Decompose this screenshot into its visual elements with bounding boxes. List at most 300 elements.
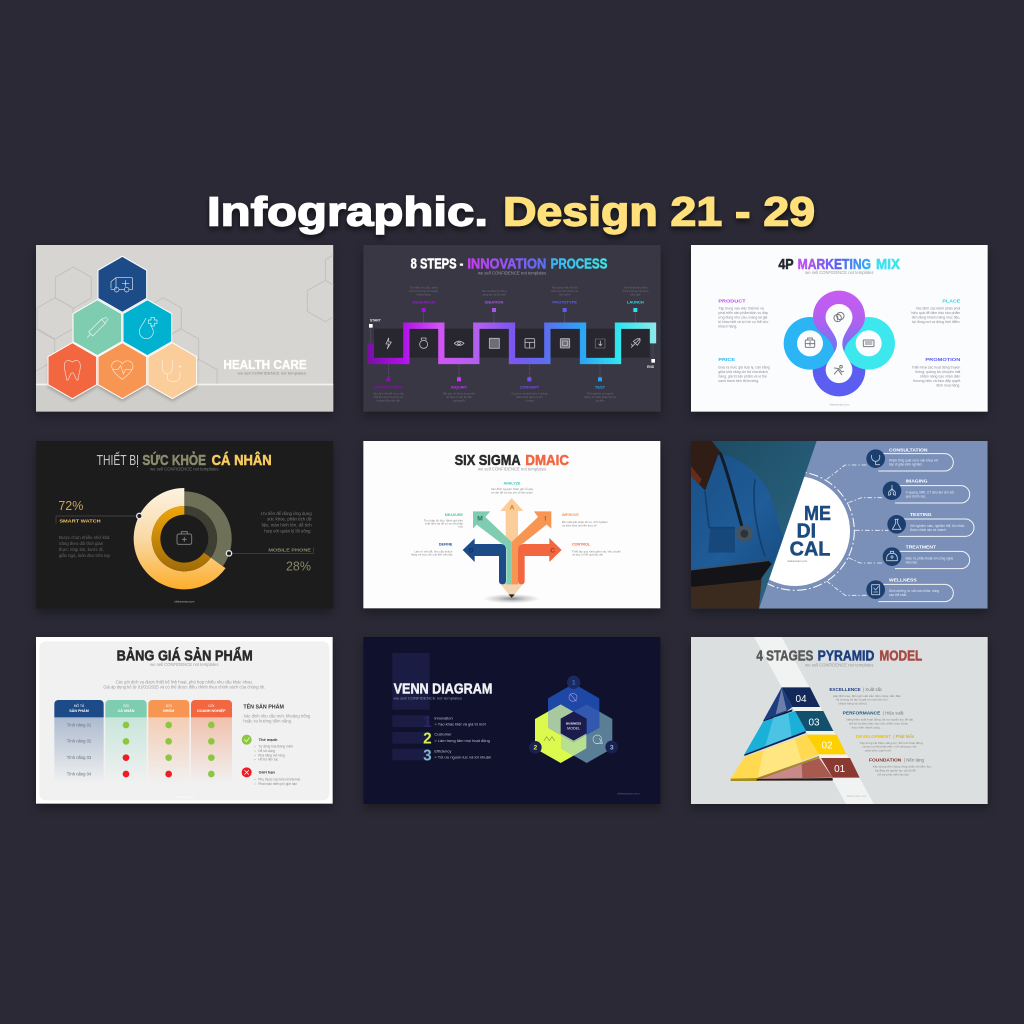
item: consultation: bác sĩ giàu kinh nghiệm. [889,463,923,467]
item: treatment: hiện đại. [906,560,918,564]
heading: 4 stages pyramid model: 4 STAGES [756,649,814,665]
callout: mobile phone: hợp với quản lý lối sống. [264,528,312,533]
callout: mobile phone: Ưu tiên để dùng ứng dụng [261,511,312,516]
item: customer [423,731,490,748]
ring: place [842,317,895,370]
text: product: trị khác biệt và lợi ích cụ thể cho [718,320,768,324]
arrow: define [463,538,506,584]
text: excellence: EXCELLENCE [829,687,861,692]
text: price: Đưa ra mức giá hợp lý, cân bằng [718,365,770,370]
text: measure [424,513,464,529]
text: limitations: Phụ thuộc vào kết nối Internet [258,777,300,781]
item: testing: TESTING [910,512,932,518]
step 6 label: kiểm tra tính khả thi và [551,289,579,293]
text: development: Tập trung cải thiện năng lực, đổi mới hoạt động, [860,741,924,745]
heading: medical: ME [804,502,831,525]
donut segment: mobile phone [184,491,232,566]
text: development: phát triển mạnh mẽ. [865,749,892,753]
arrow letters: I [544,516,546,523]
step 4 label [482,289,507,312]
step 4 label: IDEATION [485,300,503,305]
text: limitations: Phần bản miễn phí giới hạn [258,781,297,786]
heading: six sigma dmaic: DMAIC [525,453,569,469]
text: control [572,543,621,557]
panel: venn diagram [363,637,660,804]
panel: product pricing table [36,637,333,804]
text: control: CONTROL [572,543,591,547]
column bodies [54,717,232,784]
callout: smart watch: SMART WATCH [59,518,101,524]
text: product: phát triển sản phẩm/dịch vụ đáp [718,311,768,315]
column header: product description: MÔ TẢ [74,703,85,708]
step 7 label [584,377,616,402]
step 8 label: hiệu quả [630,292,641,296]
panel: personal health devices donut [36,441,333,609]
item: innovation [423,714,486,731]
heading: 8 steps: 8 STEPS - [411,256,463,272]
text: price: PRICE [718,357,735,362]
heading: six sigma dmaic: SIX SIGMA [455,453,521,469]
text: excellence: | Xuất sắc [863,687,883,692]
text: improve [562,513,609,527]
text: place: tại đúng nơi và đúng thời điểm. [912,320,960,324]
text: development: | Phát triển [893,734,915,739]
text: place: PLACE [942,298,960,303]
hexagon: customer [535,704,586,763]
item: wellness: WELLNESS [889,577,917,583]
text: analyze [491,482,534,494]
heading: venn diagram: VENN DIAGRAM [394,682,492,698]
column header: enterprise: DOANH NGHIỆP [197,708,226,713]
row labels: Tính năng 04 [67,771,92,776]
number badge 3: 3 [610,744,614,751]
intro text: Các gói dịch vụ được thiết kế linh hoạt, phù hợp nhiều nhu cầu khác nhau. [116,679,253,684]
arrow letters [469,505,555,555]
step 6 label [551,285,579,312]
text: excellence: thị trường và tạo ra giá trị vượt trội cho [836,698,888,702]
text: place: đến đúng khách hàng mục tiêu, [912,315,960,319]
text: excellence: Đạt đỉnh cao, đội ngũ xuất sắc, tiềm năng, dẫn đầu [833,693,901,698]
text: strengths: Thế mạnh [259,737,278,742]
text: improve: Đề xuất giải pháp tối ưu, thử nghiệm [562,520,609,524]
footer brand: slidescream.com [617,792,640,796]
text: analyze: ra vấn đề và các yếu tố liên quan [491,490,533,494]
hexagon: ambulance [98,256,147,312]
text: place: Xác định các kênh phân phối [916,306,961,310]
item: testing: Xét nghiệm máu, nghiệm thể, tìm nhân [910,524,965,528]
overlap: innovation and customer [548,704,586,742]
step 4 label: sáng tạo và đột phá [482,292,506,296]
text: product: PRODUCT [718,298,746,303]
heading: six sigma dmaic [455,453,569,469]
centre hexagon: business model: MODEL [567,727,580,731]
item: treatment: TREATMENT [906,545,936,551]
text: performance: chỉ số và đảm bảo mục tiêu chiến lược được [849,721,909,725]
subtitle: we sell CONFIDENCE not templates [805,662,873,667]
text: analyze: ANALYZE [504,482,521,486]
number badge 1: 1 [572,680,576,687]
item: treatment [883,545,970,569]
heading: bảng giá sản phẩm: BẢNG GIÁ SẢN PHẨM [117,646,253,664]
step 6 label: Xây dựng mẫu thử để [552,285,578,290]
row labels: Tính năng 02 [67,739,92,744]
item: efficiency [423,747,491,764]
text: promotion: nhằm nâng cao nhận diện [920,373,960,378]
end marker: END [647,365,655,369]
heading: thiết bị sức khỏe cá nhân: CÁ NHÂN [212,451,272,469]
panel: six sigma DMAIC [363,441,660,608]
pencil arrows diagram [463,498,562,603]
text: performance: Nâng hiệu suất hoạt động, tối ưu nguồn lực để đạt [846,717,913,721]
arrow: measure [473,511,512,584]
callout: smart watch: giấc ngủ, luôn đeo trên tay [59,553,111,558]
callout: mobile phone: MOBILE PHONE [268,547,312,553]
hexagon: blood drop [123,300,172,356]
text: promotion: thương hiệu và thúc đẩy quyết [913,379,960,383]
step 1 label: OPPORTUNITY [374,385,403,390]
heading: 4P marketing mix: 4P [778,257,794,273]
step 8 label: LAUNCH [627,300,644,305]
footer brand: slidescream.com [174,795,195,799]
step 1 label: hướng đến nhu cầu [377,398,401,402]
heading: thiết bị sức khỏe cá nhân: THIẾT BỊ [97,452,139,469]
text: product: ứng đúng nhu cầu, mang lại giá [718,315,767,319]
centre hexagon: business model [561,711,587,741]
item: imaging: IMAGING [906,479,928,485]
column header: personal: CÁ NHÂN [118,708,135,713]
dashed connectors [827,465,888,595]
text: improve: và triển khai cải tiến thực tế [562,523,597,527]
text: foundation: | Nền tảng [904,757,924,762]
step 3 label: để hiểu rõ vấn đề cần [446,395,472,399]
row labels: Tính năng 01 [67,723,92,728]
text: promotion: PROMOTION [925,357,961,362]
text: control: Thiết lập quy trình giám sát, tiêu chuẩn [572,549,621,553]
item: treatment: Điều trị, phẫu thuật với công nghệ [906,555,953,560]
ring holes [797,330,882,356]
item: imaging: X-quang, MRI, CT siêu âm cho kết [906,491,954,495]
step 5 label: thành khái niệm cụ thể [516,395,543,399]
subtitle: we sell CONFIDENCE not templates [805,270,873,275]
item: consultation [866,447,953,471]
item: efficiency: Efficiency [434,748,451,753]
text: strengths: Dễ sử dụng [258,748,275,753]
hexagon: stethoscope [148,343,197,399]
intro text [103,679,265,690]
callout: mobile phone [226,511,313,573]
text: measure: tích [458,525,463,529]
text: performance: | Hiệu suất [883,710,904,715]
text: promotion: thông, quảng bá, khuyến mãi [915,370,961,374]
arrow: improve [512,511,551,584]
heading: 4 stages pyramid model: MODEL [879,649,922,665]
heading: 4P marketing mix: MIX [876,257,900,273]
step 5 label: rõ ràng [525,398,534,402]
step 3 label: Đặt câu hỏi đúng trọng tâm [443,392,476,396]
item: customer: Customer [434,732,452,737]
item: consultation: Khám tổng quát và tư vấn khoa với [889,459,939,463]
arrow letters: D [469,548,474,555]
subtitle: we sell CONFIDENCE not templates [478,466,546,471]
step 7 label: cải tiến [596,398,605,402]
step 3 label: giải quyết [453,398,465,402]
callout: mobile phone: liệu, màn hình lớn, dễ tích [262,523,312,528]
item: efficiency: 3 [423,747,432,764]
column header: product description: SẢN PHẨM [69,708,89,713]
icon: medical case [177,532,192,544]
text: strengths: Tự động hóa thông minh [258,745,293,749]
text: foundation: Xây dựng nền móng vững chắc với tiềm lực, [873,763,932,768]
column header: group [148,700,189,717]
text: price: giữa khả năng chi trả của khách [718,370,768,374]
text: limitations: Giới hạn [259,770,276,775]
text: place [911,298,961,324]
step icons [386,338,640,349]
arrow: analyze [500,498,523,543]
main title: Infographic. [207,188,488,234]
text: strengths [242,735,293,762]
text: measure: suất hiện tại để có cơ sở phân [425,521,463,525]
item: innovation: Innovation [434,715,453,720]
3D pyramid [731,687,860,781]
hexagon: syringe [73,300,122,356]
text: price: cạnh tranh trên thị trường. [718,379,759,383]
heading: medical: DI [797,520,816,543]
subtitle: we sell CONFIDENCE not templates [394,696,462,701]
subtitle: we sell CONFIDENCE not templates [478,270,546,275]
callout: smart watch: 72% [58,499,83,513]
item: consultation: CONSULTATION [889,447,928,453]
subtitle: we sell CONFIDENCE not templates [238,372,306,376]
text: development: DEVELOPMENT [856,734,891,739]
step 1 label [373,377,404,402]
callout: smart watch: Được chọn nhiều nhờ khả [59,535,110,540]
step 4 label: Tạo ra nhiều ý tưởng [482,289,507,293]
text: promotion: định mua hàng. [936,384,960,388]
arrow letters: A [510,505,515,512]
text: product: khách hàng. [718,325,737,329]
tier 01: 01 [834,764,846,775]
heading: thiết bị sức khỏe cá nhân: SỨC KHỎE [142,451,206,469]
text: measure: Thu thập dữ liệu, đánh giá hiệu [424,518,463,522]
item: imaging: quả chính xác. [906,495,926,499]
main title [207,188,815,234]
step 6 label: PROTOTYPE [552,300,577,305]
photo: doctor with stethoscope [691,441,824,609]
tier 04: 04 [795,694,807,705]
row labels: Tính năng 03 [67,755,92,760]
step 5 label: Chọn lọc và phát triển ý tưởng [511,392,548,396]
text: define: hàng và mục tiêu cải tiến cần đạt [411,553,453,557]
decorative bands [392,653,430,760]
text: performance: thực hiện thành công. [852,725,881,729]
item: testing: được chính xác và nhanh. [910,528,947,532]
item: testing [887,512,974,536]
step 2 label: Tìm hiểu nhu cầu, phân [410,286,438,290]
step 3 label: INQUIRY [451,385,468,390]
start marker: START [370,318,381,322]
text: performance [843,710,913,729]
donut inner ring: smart watch [152,506,211,571]
main title: Design 21 - 29 [503,188,815,234]
step 7 label: TEST [595,385,606,390]
text: define: DEFINE [439,543,453,547]
step 2 label: khách hàng [417,292,431,296]
overlap: customer and efficiency [561,712,586,756]
item: imaging [883,479,970,503]
text: price: hàng, giá trị sản phẩm và vị thế [718,374,767,378]
hexagon: efficiency [561,704,612,763]
tier 02 number: 02 [821,741,833,752]
step 1 label: Xác định vấn đề và cơ hội [373,392,404,396]
donut inner ring: mobile phone [184,506,217,558]
panel: 8 steps innovation process [363,245,661,412]
step 6 label: tinh chỉnh [559,292,571,296]
text: analyze: Xác định nguyên nhân gốc rễ gây [491,486,534,491]
text: performance: PERFORMANCE [843,710,880,715]
hexagon: heart rate [98,343,147,399]
interlocked rings diagram [784,291,895,396]
callout: mobile phone: 28% [286,559,311,573]
text: define [411,543,453,557]
tier 03: 03 [808,717,820,728]
hexagon venn chart [529,676,618,763]
heading: health care: HEALTH CARE [223,358,307,372]
central circle [768,472,855,591]
column header: personal [105,700,147,717]
donut chart [134,488,232,589]
callout: smart watch [56,499,142,558]
item: innovation: > Tạo khác biệt và giá trị mới [434,721,486,726]
text: strengths: Hỗ trợ liên tục [258,757,279,762]
text: strengths: Khả năng mở rộng [258,753,285,757]
donut segment: smart watch [134,488,226,589]
step 2 label: tích thị trường và insight [409,289,438,293]
text: development: và tạo cơ hội phát triển, mở rộng quy mô [862,745,917,749]
item: customer: 2 [423,731,432,748]
step 7 label: dùng, thu thập phản hồi và [584,395,616,399]
arrow letters: M [477,516,483,523]
text: place: hiệu quả để đảm bảo sản phẩm [911,311,960,315]
footer brand: slidescream.com [787,559,808,563]
heading: 8 steps: INNOVATION [467,256,546,272]
ring: product [813,291,865,359]
heading: 4P marketing mix: MARKETING [798,257,871,273]
hexagon: innovation [548,684,599,742]
text: excellence [829,687,901,706]
text: foundation: hạ tầng và nguồn lực cốt lõi để [875,768,916,772]
text: promotion [912,357,961,388]
text: measure: MEASURE [445,513,464,517]
ring: price [784,317,836,370]
ring: promotion [813,344,865,396]
overlap: innovation and efficiency [574,704,599,735]
subtitle: we sell CONFIDENCE not templates [150,466,218,471]
text: product name: hoặc xu hướng tiềm năng. [243,719,292,724]
heading: 4 stages pyramid model [756,649,922,665]
column header: group: NHÓM [163,708,174,713]
column header: personal: GÓI [123,703,129,708]
heading: 8 steps [411,256,608,272]
item: wellness: Dinh dưỡng, tư vấn sức khỏe, nâng [889,589,939,593]
panel: health care [36,245,334,412]
panel: medical [691,441,988,609]
text: limitations [242,767,300,786]
end marker [647,359,655,369]
arrow: control [518,538,562,584]
heading: medical [790,506,831,556]
icons inside rings [805,312,874,375]
intro text: Giá áp dụng kể từ 01/01/2025 và có thể được điều chỉnh theo chính sách của chúng tôi. [103,685,265,690]
text: product [718,298,768,329]
text: product name: TÊN SẢN PHẨM [243,703,284,711]
text: excellence: khách hàng và xã hội. [838,702,868,706]
row labels [67,723,92,776]
step 3 label [443,377,476,402]
item: wellness: cao thể chất. [889,593,907,597]
item: efficiency: > Tối ưu nguồn lực và lợi nhuận [434,755,491,760]
text: product: Tập trung vào việc thiết kế và [718,306,764,310]
column header: group: GÓI [166,703,172,708]
centre hexagon: business model: BUSINESS [566,721,581,725]
footer brand: slidescream.com [847,794,867,798]
step 2 label [409,286,438,312]
item: customer: > Làm trung tâm mọi hoạt động [434,738,490,743]
step 2 label: RESEARCH [412,300,435,305]
step 8 label: ra thị trường một cách [622,289,649,293]
check marks [123,722,215,777]
step 8 label [622,286,649,312]
heading: medical: CAL [790,537,830,560]
heading: 8 steps: PROCESS [551,256,608,272]
text: price [718,357,770,383]
item: wellness [866,577,953,602]
tier 02 [731,735,846,781]
hexagon: tooth [48,343,97,399]
step 5 label [511,377,548,402]
heading: thiết bị sức khỏe cá nhân [97,451,272,469]
pricing table [54,700,232,784]
text: foundation: FOUNDATION [869,757,901,762]
text: control: và duy trì kết quả lâu dài [572,553,603,557]
pencil shadow [483,594,540,603]
footer brand: slidescream.com [174,599,195,603]
text: development [856,734,924,753]
heading: 4 stages pyramid model: PYRAMID [818,649,874,665]
text: promotion: Triển khai các hoạt động truyền [912,366,960,370]
step 8 label: Triển khai sản phẩm [623,286,648,290]
column header: enterprise: GÓI [208,703,214,708]
item: innovation: 1 [423,714,432,731]
footer brand: slidescream.com [829,403,850,407]
callout: mobile phone: sức khỏe, phân tích dữ [267,517,312,522]
text: define: Làm rõ vấn đề, nhu cầu khách [414,549,453,553]
pencil tip [500,583,524,598]
start marker [369,318,381,328]
text: improve: IMPROVE [562,513,579,517]
icons in venn [544,693,603,744]
step 1 label: khả thi trên thị trường và [374,395,403,399]
text: foundation [869,757,932,776]
text: product name [243,703,311,724]
text: product name: Xác định nhu cầu mới, khoảng trống [243,713,311,718]
subtitle: we sell CONFIDENCE not templates [150,662,218,667]
dark icon strip [374,329,650,358]
cross marks [123,754,172,777]
column header: product description [54,700,104,717]
white hourglass centre [826,304,852,383]
arrow letters: C [550,548,555,555]
